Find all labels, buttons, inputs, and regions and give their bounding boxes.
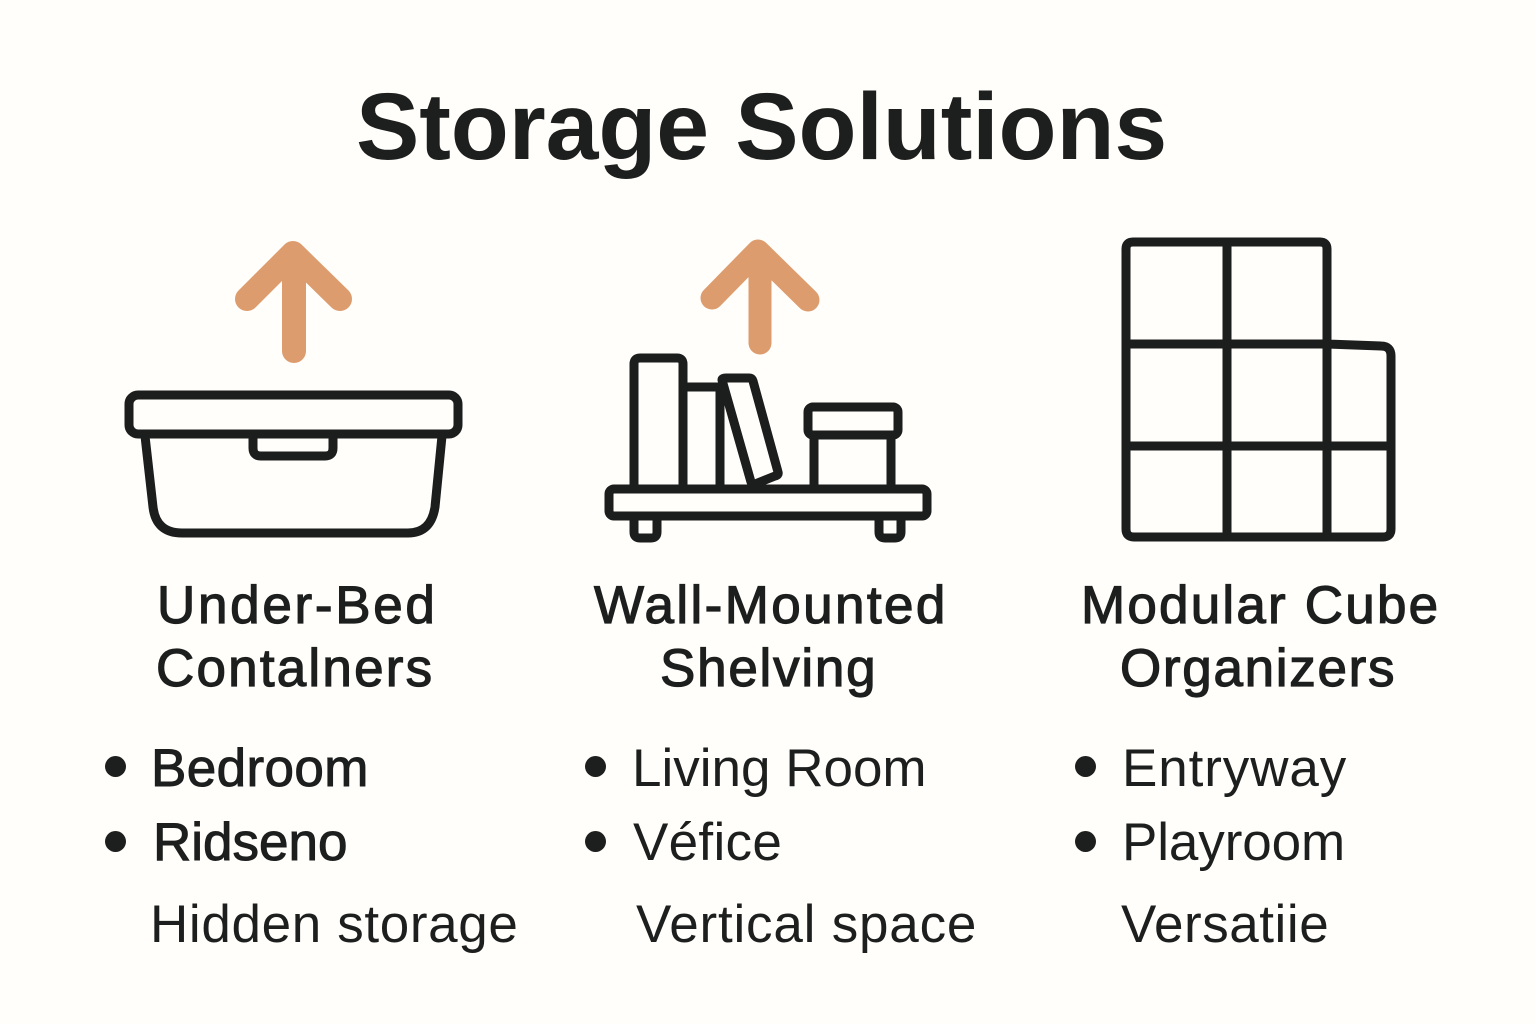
icon: wall shelf with books	[609, 358, 927, 538]
icon: under-bed container	[129, 395, 458, 533]
heading: under-bed containers: Contalners	[156, 639, 434, 698]
bullets column 3: Entryway	[1122, 739, 1347, 798]
bullets column 1: Bedroom	[151, 739, 369, 798]
heading: under-bed containers: Under-Bed	[157, 576, 438, 635]
bullets column 1	[105, 739, 519, 954]
bullets column 2: Living Room	[632, 739, 927, 798]
heading: wall-mounted shelving: Shelving	[660, 639, 877, 698]
heading: under-bed containers	[156, 576, 438, 698]
bullets column 1: Hidden storage	[150, 895, 519, 954]
icon: arrow up left	[247, 253, 340, 351]
heading: modular cube organizers: Organizers	[1120, 639, 1396, 698]
bullets column 3: Playroom	[1122, 813, 1345, 872]
bullets column 2	[585, 739, 977, 954]
heading: modular cube organizers: Modular Cube	[1081, 576, 1440, 635]
bullets column 2: Vertical space	[636, 895, 977, 954]
bullets column 3: Versatiie	[1121, 895, 1329, 954]
icon: arrow up middle	[712, 251, 808, 343]
heading: wall-mounted shelving	[594, 576, 948, 698]
icon: modular cube organizer	[1126, 242, 1391, 537]
bullets column 2: Véfice	[633, 813, 782, 872]
heading: wall-mounted shelving: Wall-Mounted	[594, 576, 948, 635]
title: Storage Solutions	[356, 74, 1167, 180]
bullets column 3	[1075, 739, 1347, 954]
bullets column 1: Ridseno	[153, 813, 347, 872]
heading: modular cube organizers	[1081, 576, 1440, 698]
